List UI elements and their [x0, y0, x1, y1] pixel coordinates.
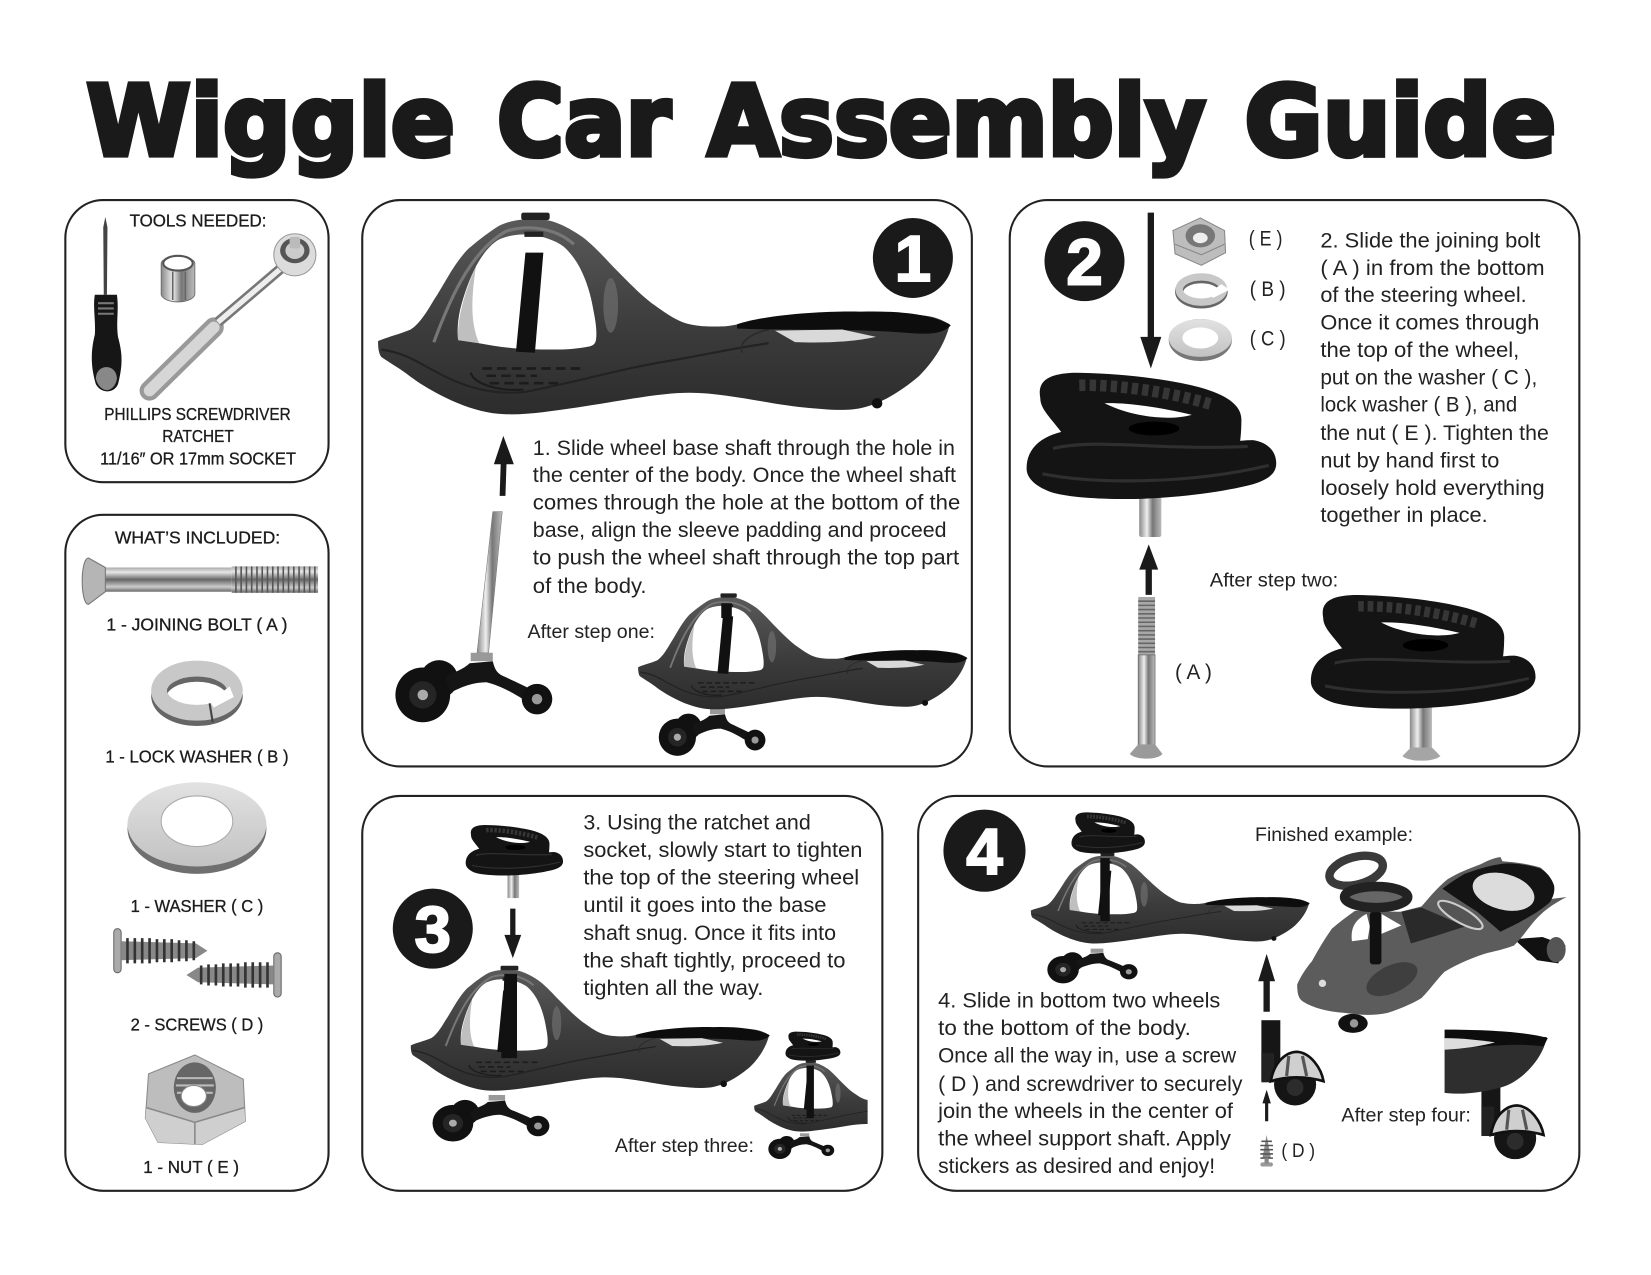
step 3 instructions: socket, slowly start to tighten — [583, 839, 862, 862]
step 1 instructions — [533, 437, 960, 598]
panel: tools needed — [65, 200, 329, 482]
image: rear detail after step four — [1445, 1030, 1548, 1159]
label C: ( C ) — [1250, 327, 1286, 350]
icon: phillips screwdriver — [92, 217, 122, 391]
caption: after step three: After step three: — [615, 1135, 754, 1157]
number badge 3 — [393, 889, 473, 969]
icon: screws — [114, 929, 281, 997]
label E: ( E ) — [1249, 227, 1282, 250]
panel: what's included — [65, 515, 329, 1191]
step 2 instructions: lock washer ( B ), and — [1320, 394, 1517, 417]
arrow up — [1258, 954, 1275, 1012]
image: steering wheel with bolt end — [1027, 373, 1276, 537]
label B: ( B ) — [1250, 278, 1286, 301]
step 1 instructions: the center of the body. Once the wheel shaft — [533, 464, 956, 487]
icon: joining bolt — [82, 558, 318, 604]
icon: socket — [161, 256, 195, 302]
tools list: 11/16″ OR 17mm SOCKET — [100, 448, 296, 468]
arrow up small — [1262, 1090, 1271, 1121]
number badge 1 — [873, 218, 953, 298]
image: rear caster wheel — [1261, 1020, 1323, 1105]
step 2 instructions: put on the washer ( C ), — [1320, 366, 1537, 389]
tools list: RATCHET — [162, 426, 234, 446]
step 2 instructions: ( A ) in from the bottom — [1320, 257, 1545, 280]
icon: washer C — [1169, 319, 1232, 361]
panel: step 4 — [918, 796, 1579, 1191]
step 1 instructions: base, align the sleeve padding and proceed — [533, 519, 947, 542]
step 3 instructions: shaft snug. Once it fits into — [583, 922, 836, 945]
title: Car — [497, 65, 671, 178]
step 4 instructions: ( D ) and screwdriver to securely — [938, 1073, 1243, 1096]
step 1 instructions: 1. Slide wheel base shaft through the hole in — [533, 437, 955, 460]
step 4 instructions: 4. Slide in bottom two wheels — [938, 990, 1220, 1013]
step 2 instructions: of the steering wheel. — [1320, 284, 1527, 307]
label: joining bolt: 1 - JOINING BOLT ( A ) — [106, 615, 287, 635]
step 3 instructions: 3. Using the ratchet and — [583, 812, 811, 835]
step 3 instructions: the shaft tightly, proceed to — [583, 950, 846, 973]
image: steering wheel after step two — [1311, 595, 1536, 761]
heading: what's included: WHAT’S INCLUDED: — [115, 527, 280, 547]
step 1 instructions: to push the wheel shaft through the top part — [533, 546, 959, 569]
title: Assembly — [708, 65, 1206, 178]
step 2 instructions: loosely hold everything — [1320, 477, 1545, 500]
number badge 2 — [1044, 221, 1125, 301]
image: wiggle car body — [378, 213, 951, 414]
number badge 4: 4 — [966, 815, 1003, 888]
heading: tools needed: TOOLS NEEDED: — [130, 210, 266, 230]
image: finished wiggle car — [1297, 850, 1567, 1033]
arrow down — [1140, 213, 1161, 368]
image: steering wheel assembly — [466, 825, 563, 898]
step 2 instructions — [1320, 229, 1549, 527]
step 3 instructions: the top of the steering wheel — [583, 866, 859, 889]
title: Wiggle — [86, 65, 455, 178]
step 2 instructions: together in place. — [1320, 504, 1488, 527]
step 4 instructions — [937, 990, 1243, 1178]
label D: ( D ) — [1281, 1140, 1315, 1162]
icon: lock washer B — [1179, 277, 1230, 304]
icon: washer — [127, 782, 266, 874]
step 2 instructions: the top of the wheel, — [1320, 339, 1519, 362]
step 2 instructions: Once it comes through — [1320, 312, 1539, 335]
step 4 instructions: join the wheels in the center of — [937, 1100, 1233, 1123]
image: wheel base shaft — [395, 512, 552, 722]
label: screws: 2 - SCREWS ( D ) — [131, 1015, 263, 1035]
title — [86, 65, 1556, 178]
step 2 instructions: nut by hand first to — [1320, 449, 1499, 472]
tools list — [100, 404, 296, 468]
icon: nut E — [1173, 218, 1226, 265]
panel: step 2 — [1010, 200, 1579, 766]
label: lock washer: 1 - LOCK WASHER ( B ) — [105, 746, 289, 766]
panel: step 3 — [361, 794, 884, 1192]
number badge 2: 2 — [1066, 225, 1103, 298]
number badge 3: 3 — [415, 893, 451, 966]
arrow down — [504, 909, 521, 958]
tools list: PHILLIPS SCREWDRIVER — [104, 404, 291, 424]
image: car with wheel base — [411, 966, 770, 1142]
step 2 instructions: 2. Slide the joining bolt — [1320, 229, 1541, 252]
step 3 instructions: tighten all the way. — [583, 977, 763, 1000]
number badge 1: 1 — [895, 222, 931, 295]
image: car after step three — [754, 1032, 868, 1159]
panel: step 1 — [362, 200, 972, 766]
icon: nut — [145, 1055, 245, 1144]
caption: after step four: After step four: — [1341, 1104, 1471, 1126]
step 2 instructions: the nut ( E ). Tighten the — [1320, 422, 1549, 445]
title: Guide — [1245, 65, 1556, 178]
arrow up — [1139, 544, 1158, 595]
step 4 instructions: the wheel support shaft. Apply — [938, 1127, 1231, 1150]
caption: finished example: Finished example: — [1255, 824, 1413, 846]
step 3 instructions: until it goes into the base — [583, 894, 827, 917]
label: washer: 1 - WASHER ( C ) — [131, 896, 263, 916]
arrow up — [494, 436, 514, 496]
label: nut: 1 - NUT ( E ) — [143, 1157, 239, 1177]
step 4 instructions: Once all the way in, use a screw — [938, 1044, 1237, 1067]
icon: screw D — [1260, 1135, 1273, 1167]
caption: after step two: After step two: — [1210, 569, 1338, 591]
image: car after step one — [638, 593, 967, 756]
image: joining bolt A — [1130, 597, 1162, 759]
label A: ( A ) — [1175, 661, 1212, 684]
step 3 instructions — [583, 812, 862, 1000]
number badge 4 — [943, 810, 1026, 892]
caption: after step one: After step one: — [528, 621, 655, 643]
icon: lock washer — [159, 669, 235, 722]
step 1 instructions: comes through the hole at the bottom of the — [533, 492, 960, 515]
icon: ratchet — [150, 234, 316, 391]
image: car with wheel — [1031, 812, 1310, 983]
step 4 instructions: stickers as desired and enjoy! — [938, 1155, 1215, 1178]
step 1 instructions: of the body. — [533, 575, 647, 598]
step 4 instructions: to the bottom of the body. — [938, 1017, 1191, 1040]
